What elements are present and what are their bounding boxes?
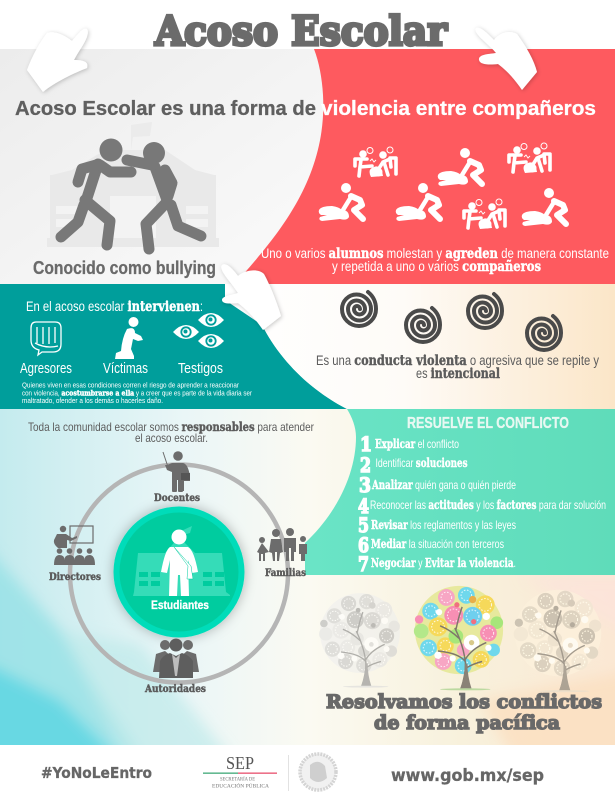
icon: fist bbox=[31, 322, 61, 355]
list: seven steps: Revisar los reglamentos y las leyes bbox=[371, 518, 516, 532]
text: risk note: Quienes viven en esas condiciones corren el riesgo de aprender a reaccionar bbox=[22, 380, 239, 390]
center circle: students bbox=[114, 506, 244, 638]
title: Acoso Escolar bbox=[154, 8, 448, 55]
footer: hashtag: #YoNoLeEntro bbox=[41, 764, 152, 782]
labels: aggressors, victims, witnesses: Agresores bbox=[20, 361, 72, 377]
heading: let's resolve conflicts peacefully bbox=[326, 691, 602, 734]
footer: SEP logo bbox=[203, 753, 277, 790]
text: students harass repeatedly: y repetida a uno o varios compañeros bbox=[332, 259, 541, 275]
label: teachers: Docentes bbox=[154, 493, 200, 504]
hand pointer: center bbox=[221, 264, 281, 330]
footer: SEP logo: EDUCACIÓN PÚBLICA bbox=[212, 784, 269, 790]
heading: resolve the conflict: RESUELVE EL CONFLICTO bbox=[407, 415, 569, 432]
ring: school community bbox=[70, 464, 288, 682]
text: violent conduct: es intencional bbox=[416, 366, 500, 382]
heading: definition, dark part: Acoso Escolar es una forma de bbox=[15, 97, 316, 120]
footer: SEP logo: SECRETARÍA DE bbox=[220, 776, 255, 782]
list: seven steps bbox=[358, 432, 606, 576]
heading: participants: En el acoso escolar intervienen: bbox=[26, 299, 203, 315]
hand pointer: top left bbox=[27, 29, 88, 92]
icon: authorities bbox=[153, 638, 199, 678]
icons: people attacking classmates bbox=[319, 143, 566, 229]
text: violent conduct bbox=[316, 353, 599, 382]
icon: principals bbox=[54, 526, 95, 565]
heading: definition, white part: violencia entre compañeros bbox=[321, 97, 596, 120]
list: seven steps: 2 bbox=[360, 453, 371, 477]
footer: SEP logo: SEP bbox=[226, 753, 254, 773]
list: seven steps: Identificar soluciones bbox=[376, 456, 468, 470]
text: students harass repeatedly bbox=[261, 246, 609, 275]
icons: spirals bbox=[342, 292, 561, 350]
label: principals: Directores bbox=[49, 572, 101, 583]
panel: red violence bbox=[235, 49, 615, 284]
list: seven steps: Mediar la situación con terceros bbox=[371, 537, 504, 551]
list: seven steps: 3 bbox=[359, 473, 371, 497]
footer: website: www.gob.mx/sep bbox=[391, 766, 544, 786]
panel: teal participants bbox=[0, 284, 347, 409]
text: community responsibility: el acoso escolar. bbox=[135, 431, 208, 445]
list: seven steps: Negociar y Evitar la violencia. bbox=[371, 556, 516, 570]
illustration: three trees bbox=[319, 586, 601, 692]
text: risk note bbox=[22, 380, 252, 405]
list: seven steps: 1 bbox=[360, 432, 372, 456]
list: seven steps: 5 bbox=[358, 513, 369, 537]
label: families: Familias bbox=[265, 568, 306, 579]
illustration: fighters in front of school bbox=[47, 122, 219, 249]
icon: families bbox=[257, 528, 307, 561]
footer: divider and national seal bbox=[288, 754, 336, 791]
center circle: students: Estudiantes bbox=[151, 598, 209, 612]
labels: aggressors, victims, witnesses bbox=[20, 361, 223, 377]
heading: let's resolve conflicts peacefully: Resolvamos los conflictos bbox=[326, 691, 602, 713]
icon: witnesses eyes bbox=[173, 313, 224, 348]
icon: teacher bbox=[163, 451, 190, 492]
text: risk note: con violencia, acostumbrarse a ella y a creer que es parte de la vida diaria ser bbox=[22, 388, 252, 397]
panel: resolve the conflict bbox=[305, 409, 615, 575]
list: seven steps: Analizar quién gana o quién pierde bbox=[371, 478, 516, 492]
panel: cream repeated behaviour bbox=[232, 284, 615, 409]
labels: aggressors, victims, witnesses: Víctimas bbox=[103, 361, 148, 377]
hand pointer: top right bbox=[475, 28, 537, 90]
text: community responsibility bbox=[28, 420, 314, 445]
list: seven steps: 6 bbox=[358, 533, 369, 557]
list: seven steps: Explicar el conflicto bbox=[375, 437, 459, 451]
list: seven steps: 7 bbox=[358, 552, 369, 576]
panel: grey definition bbox=[0, 49, 330, 284]
heading: let's resolve conflicts peacefully: de forma pacífica bbox=[374, 712, 560, 734]
text: community responsibility: Toda la comunidad escolar somos responsables para atender bbox=[28, 420, 314, 434]
caption: known as bullying: Conocido como bullying bbox=[33, 257, 216, 278]
list: seven steps: 4 bbox=[358, 494, 369, 518]
label: authorities: Autoridades bbox=[144, 684, 206, 695]
labels: aggressors, victims, witnesses: Testigos bbox=[178, 361, 223, 377]
text: risk note: maltratado, ofender a los demás o hacerles daño. bbox=[22, 396, 163, 405]
icon: victim kneeling bbox=[115, 317, 143, 359]
